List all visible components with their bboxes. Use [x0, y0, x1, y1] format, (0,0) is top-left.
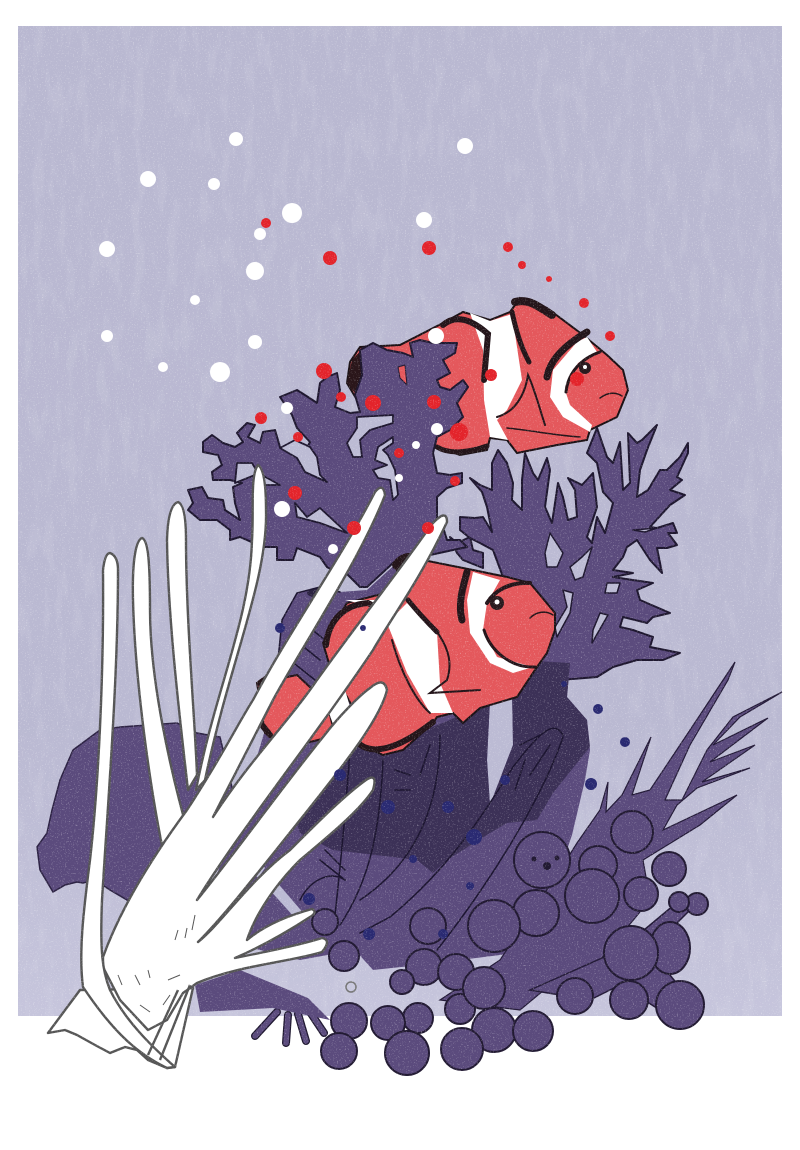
base strands: [148, 985, 190, 1060]
fish 1 dark markings: [437, 301, 622, 452]
coral 1 holes: [235, 415, 398, 533]
fish 2 white bands: [387, 603, 453, 713]
fish 1 body: [347, 298, 628, 455]
fish 2 eye: [490, 596, 504, 610]
grass fronds: [195, 662, 782, 1043]
fish colour through coral: [398, 365, 407, 385]
shadow on tubes: [285, 660, 590, 873]
fish 2 lower: [257, 558, 555, 755]
lump coral left: [37, 723, 235, 930]
navy dots: [275, 623, 630, 940]
red bubbles: [255, 218, 615, 535]
left tentacle: [81, 553, 175, 1068]
bubble anemone balls: [312, 811, 708, 1075]
fish 2 body: [323, 558, 555, 755]
white anemone: [48, 465, 447, 1068]
coral 2 holes: [545, 528, 657, 643]
anemone hatch marks: [118, 915, 195, 1012]
fish 1 white bands: [470, 313, 522, 440]
fish 1 eye: [579, 362, 591, 374]
light gaps behind anemone: [218, 820, 305, 920]
tube outlines: [278, 587, 563, 950]
fish 1 tail dark edge: [347, 345, 368, 400]
fish 2 tail: [257, 675, 333, 742]
white bubbles: [99, 132, 473, 554]
main body: [103, 488, 447, 1030]
small finger shape under anemone: [195, 970, 330, 1043]
back tentacles: [133, 538, 190, 860]
tube sponges and trunk: [215, 560, 590, 970]
fish 1 upper: [347, 298, 628, 455]
coral 1 tree: [188, 340, 468, 587]
lower stems: [530, 900, 695, 1010]
coral 2 right branching: [450, 425, 688, 680]
gap between tubes: [487, 688, 513, 805]
fish 2 dark markings: [260, 558, 553, 749]
base frill: [48, 988, 193, 1068]
tube cap: [307, 588, 333, 598]
